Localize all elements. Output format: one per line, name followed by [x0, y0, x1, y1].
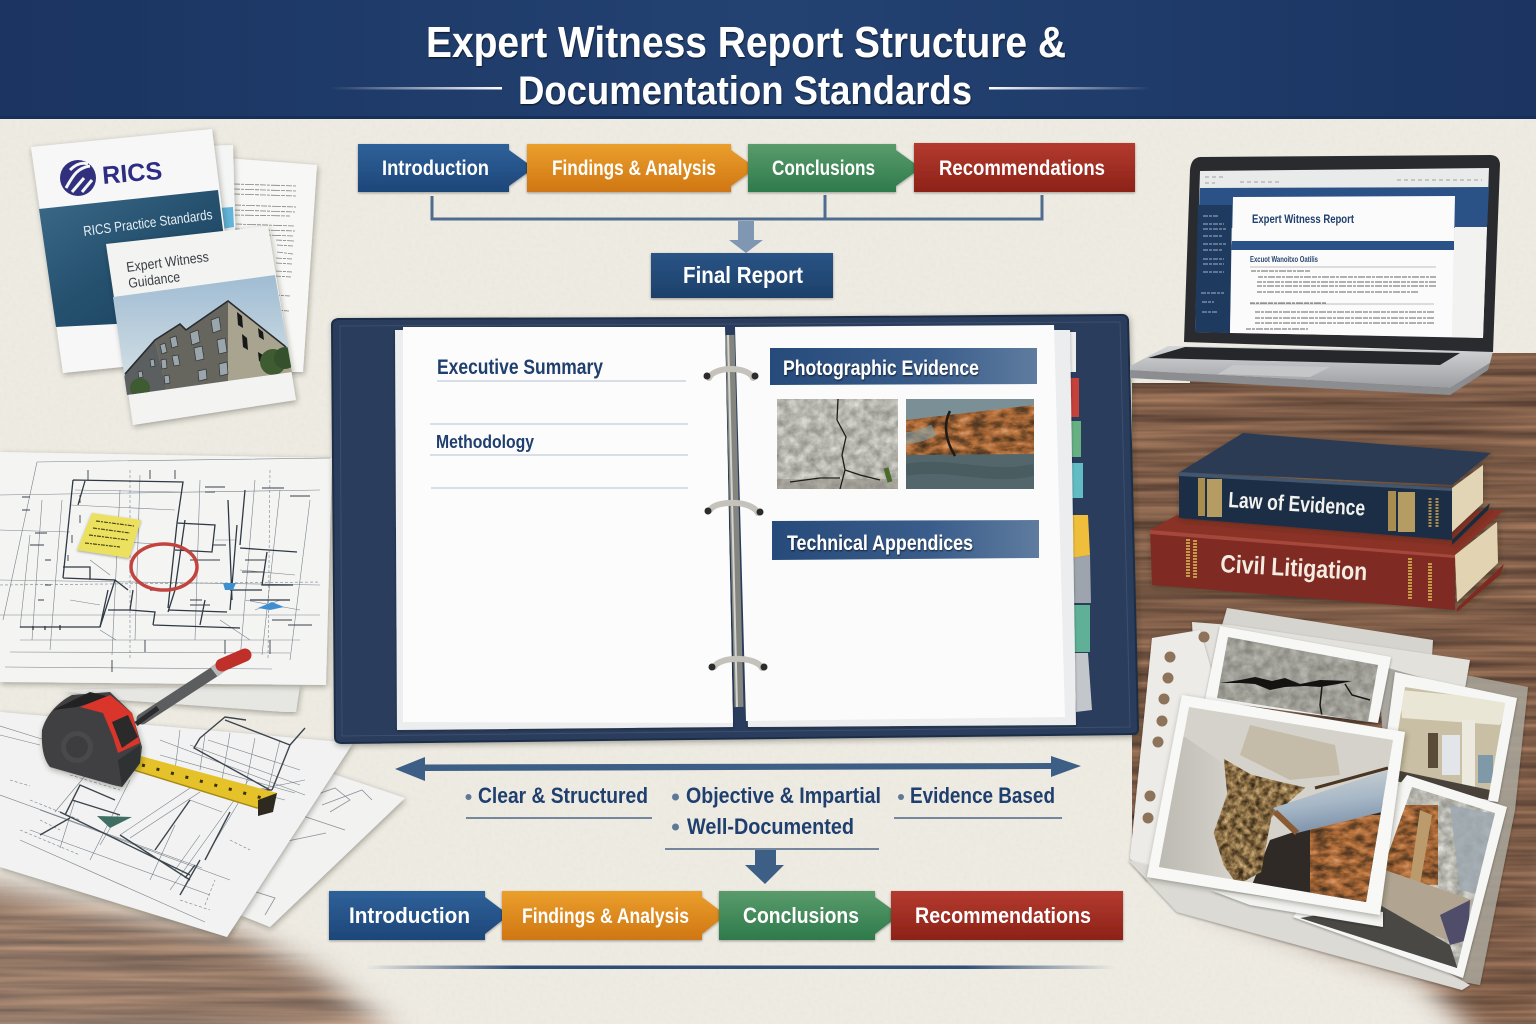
step: conclusions: Conclusions — [743, 903, 859, 928]
title — [426, 18, 1066, 113]
blue marks — [223, 583, 284, 610]
right page — [735, 325, 1076, 727]
standards bullet list: Objective & Impartial — [686, 783, 881, 808]
book: civil litigation: Civil Litigation — [1220, 550, 1368, 586]
step: recommendations — [891, 891, 1123, 940]
open ring binder — [332, 315, 1138, 743]
green marker — [97, 816, 132, 828]
left page — [395, 327, 733, 730]
standards bullet list: Clear & Structured — [478, 783, 648, 808]
step: introduction — [358, 144, 534, 192]
technical appendices banner — [772, 520, 1039, 560]
tape measure body — [42, 692, 142, 787]
technical appendices banner: Technical Appendices — [787, 532, 973, 555]
printed text sheet — [210, 158, 317, 372]
down arrow — [745, 850, 784, 884]
executive summary heading: Executive Summary — [437, 356, 603, 379]
bottom process flow — [329, 891, 1123, 940]
step: recommendations — [914, 143, 1135, 192]
step: recommendations: Recommendations — [939, 157, 1105, 180]
step: recommendations: Recommendations — [915, 903, 1091, 928]
report document: Excuot Wanoitxo Oatilis — [1250, 255, 1318, 264]
step: findings and analysis — [502, 891, 726, 940]
guidance card: Guidance — [127, 268, 181, 291]
background: paper wall and wooden desk — [0, 353, 1536, 1024]
binder cover — [332, 315, 1138, 743]
stacked law books — [1150, 433, 1504, 612]
back lower sheets — [60, 685, 405, 927]
RICS logo: RICS — [101, 157, 163, 190]
footer rule — [365, 966, 1115, 969]
perforated and translucent back sheets — [1128, 608, 1528, 990]
laptop showing expert witness report — [1130, 155, 1500, 395]
step: introduction: Introduction — [349, 903, 470, 928]
marker pen — [136, 655, 245, 724]
building photo — [113, 275, 292, 395]
ring mechanism — [704, 335, 768, 707]
index tabs — [1068, 332, 1092, 712]
photo: interior — [1380, 672, 1517, 805]
RICS cover: RICS Practice Standards — [82, 206, 213, 239]
step: findings and analysis: Findings & Analysis — [552, 157, 716, 180]
report document — [1230, 196, 1455, 337]
guidance card: Expert Witness — [125, 248, 210, 275]
arrow to final report — [729, 221, 763, 253]
photo: cracked wall — [777, 399, 898, 489]
standards bullet list — [466, 783, 1055, 839]
double-headed arrow — [395, 756, 1081, 781]
photographic evidence banner — [770, 348, 1037, 385]
final report box — [651, 253, 833, 298]
RICS logo — [60, 157, 163, 196]
step: conclusions — [748, 144, 921, 192]
book: law of evidence: Law of Evidence — [1228, 487, 1366, 521]
photo: rust and spalling — [1293, 775, 1507, 978]
photo: cracked concrete — [1205, 626, 1391, 725]
laptop base — [1130, 346, 1493, 395]
report document: Expert Witness Report — [1252, 214, 1354, 226]
step: introduction — [329, 891, 509, 940]
quality standards section — [395, 756, 1081, 884]
methodology heading: Methodology — [436, 432, 534, 452]
standards bullet list: Evidence Based — [910, 783, 1055, 808]
second sheet behind cover — [205, 145, 238, 340]
book: law of evidence — [1179, 433, 1491, 545]
top process flow — [358, 143, 1135, 298]
blueprints, tape measure and marker — [0, 452, 405, 937]
top floor plan sheet — [0, 452, 332, 685]
step: conclusions — [719, 891, 900, 940]
photo: rusted pipe — [906, 399, 1034, 489]
photo: damaged pipe — [1147, 695, 1405, 915]
step: introduction: Introduction — [382, 157, 489, 180]
photographic evidence banner: Photographic Evidence — [783, 357, 979, 380]
header banner — [0, 0, 1536, 119]
sticky note — [77, 513, 141, 558]
step: findings and analysis: Findings & Analysis — [522, 905, 689, 928]
white print edge under main photo — [1210, 890, 1383, 927]
guidance card — [100, 226, 300, 425]
lower blueprint sheet — [0, 712, 353, 937]
bracket connector — [432, 195, 1042, 219]
step: conclusions: Conclusions — [772, 157, 875, 180]
final report box: Final Report — [683, 262, 803, 288]
title: Documentation Standards — [518, 69, 972, 113]
tape blade — [127, 755, 277, 816]
standards bullet list: Well-Documented — [687, 814, 854, 839]
red circle — [131, 544, 197, 590]
RICS cover — [31, 129, 240, 373]
title: Expert Witness Report Structure & — [426, 18, 1066, 67]
laptop lid and screen — [1184, 155, 1500, 352]
book: civil litigation — [1150, 510, 1504, 612]
documents: RICS practice standards and expert witness guidance — [31, 129, 317, 425]
stack of inspection photographs — [1128, 608, 1528, 990]
step: findings and analysis — [527, 144, 756, 192]
